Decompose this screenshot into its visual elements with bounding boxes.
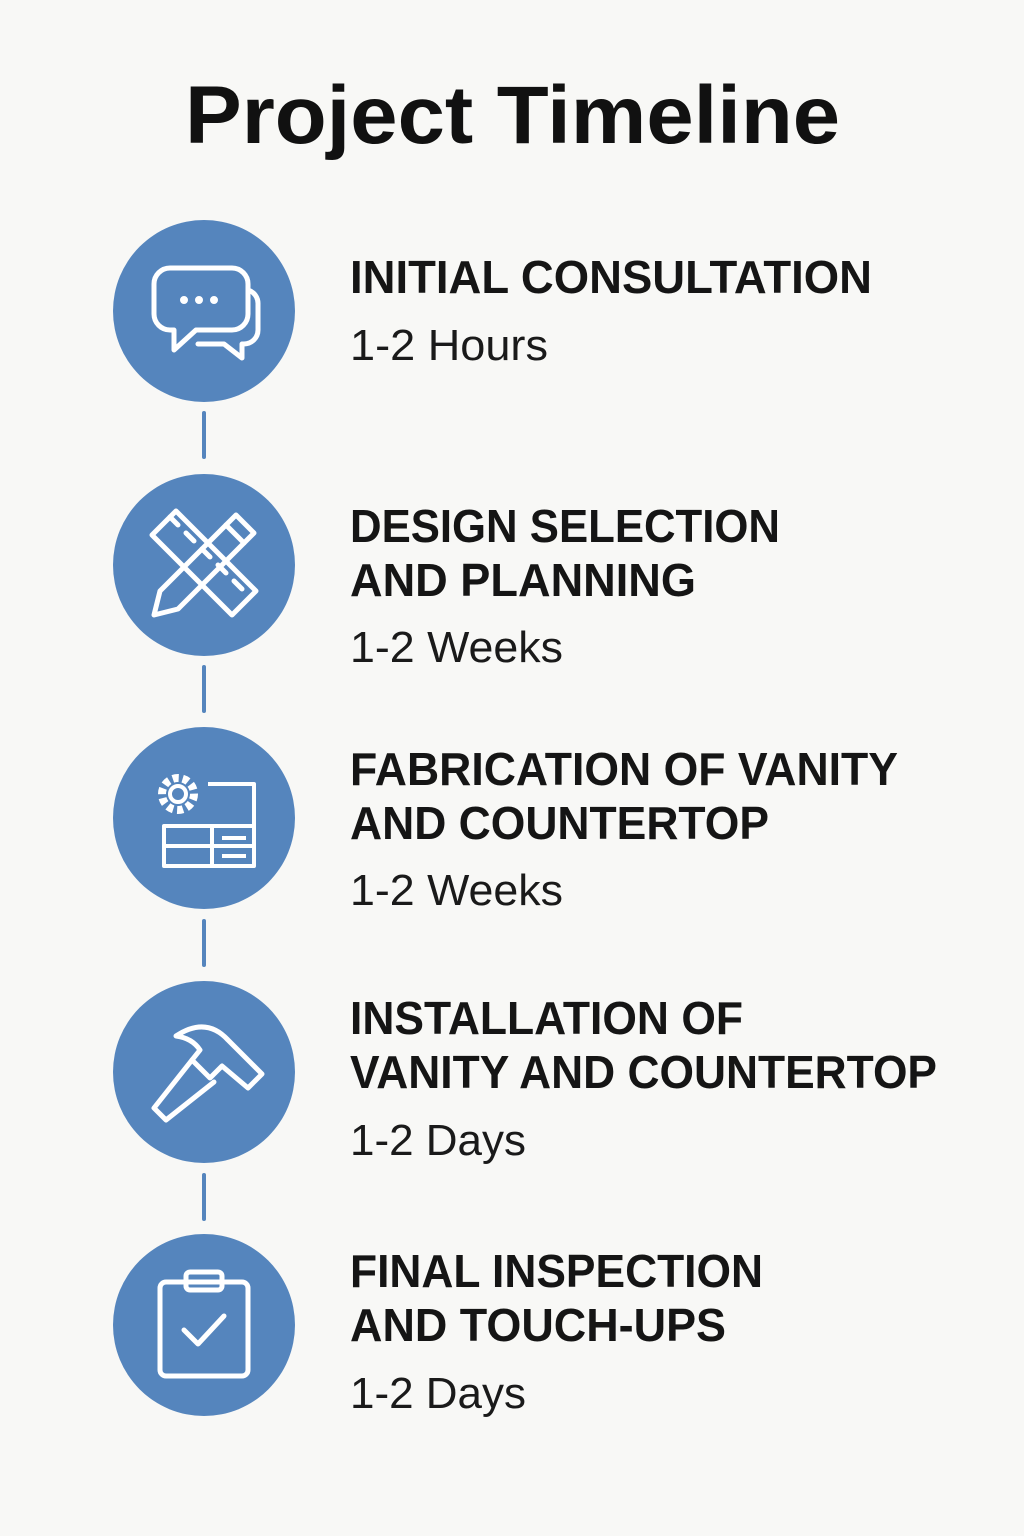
step 4: installation: VANITY AND COUNTERTOP xyxy=(350,1046,937,1098)
step 2: design selection: AND PLANNING xyxy=(350,554,696,606)
text: step 3: FABRICATION OF VANITY xyxy=(350,743,898,795)
step 4: installation: 1-2 Days xyxy=(350,1116,526,1165)
icon: gear and cabinet xyxy=(162,778,254,866)
step 3: fabrication: 1-2 Weeks xyxy=(350,866,563,915)
icon: clipboard check xyxy=(160,1272,248,1376)
icon: hammer xyxy=(154,1027,262,1120)
step 3: fabrication: AND COUNTERTOP xyxy=(350,797,769,849)
step 1: initial consultation: 1-2 Hours xyxy=(350,321,548,370)
step 2: design selection xyxy=(113,474,780,672)
text: step 2: DESIGN SELECTION xyxy=(350,500,780,552)
text: step 5: FINAL INSPECTION xyxy=(350,1245,763,1297)
step 2: design selection: 1-2 Weeks xyxy=(350,623,563,672)
step 5: final inspection xyxy=(113,1234,763,1418)
step 5: final inspection: AND TOUCH-UPS xyxy=(350,1299,726,1351)
step 3: fabrication xyxy=(113,727,898,915)
step 5: final inspection: 1-2 Days xyxy=(350,1369,526,1418)
text: step 1: INITIAL CONSULTATION xyxy=(350,251,872,303)
step 1: initial consultation xyxy=(113,220,872,402)
step 4: installation xyxy=(113,981,937,1165)
connector lines xyxy=(202,413,206,1219)
icon: chat bubbles xyxy=(154,268,258,358)
icon: pencil and ruler xyxy=(152,511,256,615)
title: Project Timeline xyxy=(185,70,840,161)
text: step 4: INSTALLATION OF xyxy=(350,992,743,1044)
